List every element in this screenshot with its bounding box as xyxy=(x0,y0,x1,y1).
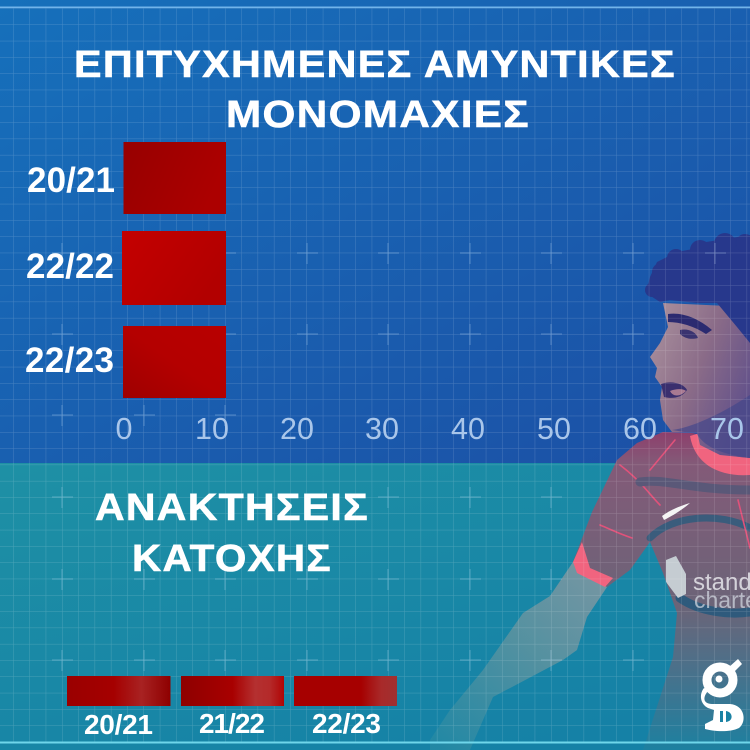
x axis values: 10 xyxy=(195,412,229,446)
crest text on shirt xyxy=(662,503,750,613)
season labels: 22/23 xyxy=(312,708,381,739)
title: defensive duels: ΕΠΙΤΥΧΗΜΕΝΕΣ ΑΜΥΝΤΙΚΕΣ xyxy=(74,44,676,86)
bar 21/22 xyxy=(181,676,284,706)
title: defensive duels: ΜΟΝΟΜΑΧΙΕΣ xyxy=(226,94,530,136)
background: teal lower panel xyxy=(0,463,750,750)
grid crosses xyxy=(52,243,726,671)
frame line: bottom xyxy=(0,742,750,744)
bar 22/23 xyxy=(123,326,226,398)
mouth xyxy=(661,382,687,398)
x axis values: 70 xyxy=(710,412,744,446)
title: possession recoveries: ΚΑΤΟΧΗΣ xyxy=(132,538,332,580)
bar 20/21 xyxy=(124,142,226,214)
bar 22/22 xyxy=(122,231,226,305)
category labels: 22/22 xyxy=(26,247,114,286)
category labels: 22/23 xyxy=(25,341,114,380)
bar chart: possession recoveries xyxy=(67,676,397,740)
shirt collar xyxy=(690,433,750,475)
jaw shadow xyxy=(672,395,750,458)
neck and face xyxy=(650,303,750,458)
season labels: 20/21 xyxy=(84,709,153,740)
x axis values: 20 xyxy=(280,412,314,446)
title: possession recoveries: ΑΝΑΚΤΗΣΕΙΣ xyxy=(95,487,369,529)
x axis values: 50 xyxy=(537,412,571,446)
x axis values: 30 xyxy=(365,412,399,446)
title: defensive duels xyxy=(74,44,676,136)
shirt folds xyxy=(600,440,750,613)
player arm xyxy=(430,562,607,750)
eyebrow xyxy=(668,314,712,334)
x axis values: 0 xyxy=(116,412,132,446)
background: blue upper panel xyxy=(0,0,750,463)
shirt sleeve cuff xyxy=(573,542,613,587)
x axis values: 60 xyxy=(623,412,657,446)
category labels xyxy=(25,161,115,380)
hair xyxy=(645,233,750,343)
title: possession recoveries xyxy=(95,487,369,580)
x axis values: 40 xyxy=(451,412,485,446)
category labels: 20/21 xyxy=(27,161,115,200)
frame line: top xyxy=(0,6,750,8)
season labels: 21/22 xyxy=(199,708,265,739)
season labels xyxy=(84,708,381,740)
bar chart: defensive duels xyxy=(25,142,744,446)
player shirt xyxy=(573,432,750,750)
player photo xyxy=(430,233,750,750)
bar 20/21 xyxy=(67,676,170,706)
x axis values xyxy=(116,412,744,446)
bar 22/23 xyxy=(294,676,397,706)
eye xyxy=(680,329,698,339)
logo: g xyxy=(701,659,744,731)
tongue xyxy=(670,389,686,396)
